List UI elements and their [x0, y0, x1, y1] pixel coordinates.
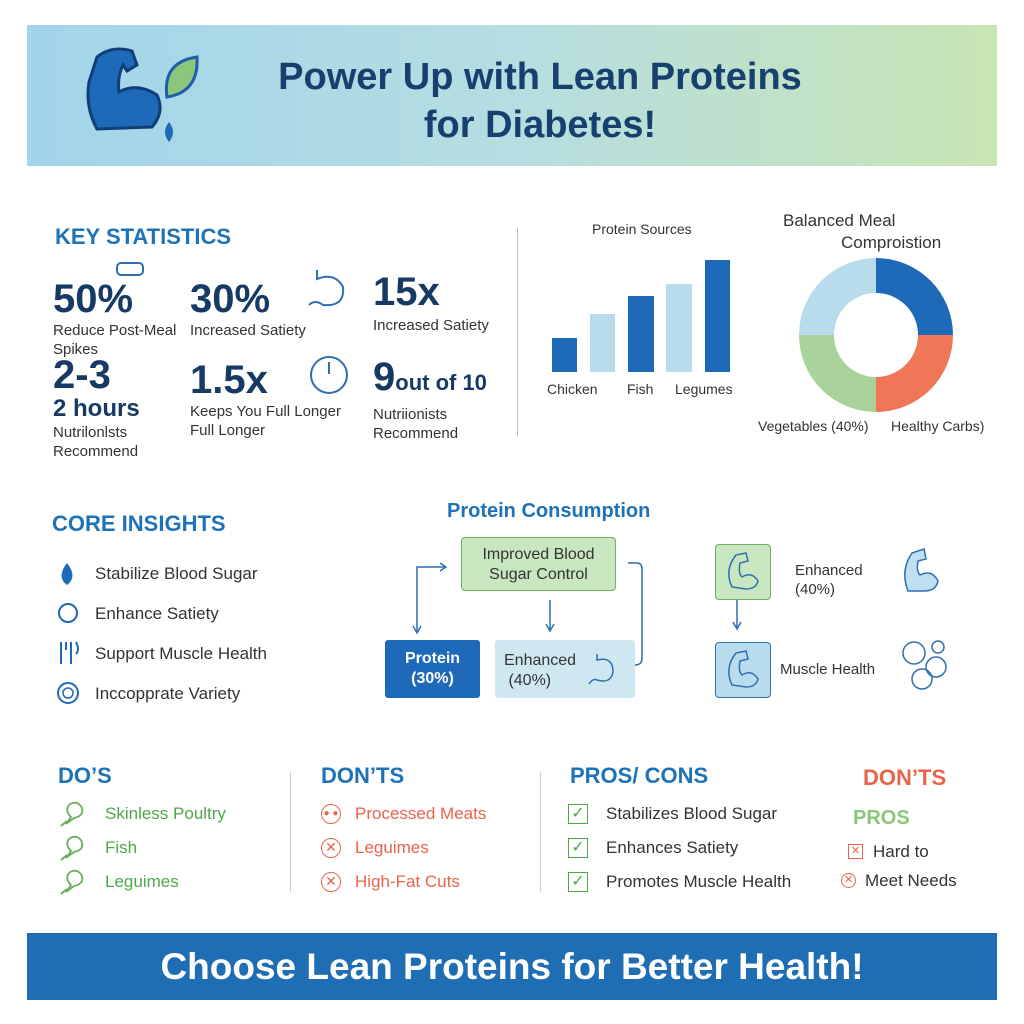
panel: pros/cons: ✓ [571, 873, 585, 890]
panel: pros/cons: Enhances Satiety [606, 838, 738, 857]
panel: pros/cons [568, 763, 791, 892]
stat 1.5x: Full Longer [190, 422, 265, 439]
panel: don'ts / pros: DON’TS [863, 765, 946, 790]
panel: don'ts / pros: Hard to [873, 842, 929, 861]
stat 15x: Increased Satiety [373, 317, 489, 334]
stat 50% [53, 277, 176, 358]
panel: do's: Fish [105, 838, 137, 857]
panel: pros/cons: Promotes Muscle Health [606, 872, 791, 891]
icon: stomach [308, 270, 344, 306]
panel: core insights: Support Muscle Health [95, 644, 267, 663]
stat 50%: Spikes [53, 341, 98, 358]
box: protein 30%: Protein [405, 650, 460, 667]
icon: drumstick [60, 836, 84, 861]
panel: don'ts / pros: ✕ [844, 874, 853, 886]
panel: pros/cons: ✓ [571, 839, 585, 856]
stat 9 out of 10 [373, 355, 487, 442]
flowchart: protein consumption: Protein Consumption [447, 500, 650, 522]
box: enhanced 40%: (40%) [508, 672, 551, 689]
panel: don'ts: DON’TS [321, 763, 404, 788]
panel: pros/cons: ✓ [571, 805, 585, 822]
panel: don'ts: ✕ [325, 839, 337, 855]
stat 30%: 30% [190, 277, 270, 321]
panel: don'ts: Leguimes [355, 838, 429, 857]
panel: key statistics [53, 224, 489, 460]
flowchart: protein consumption: Enhanced [795, 562, 863, 579]
stat 2-3 hours: Nutrilonlsts [53, 424, 127, 441]
stat 9 out of 10: Nutriionists [373, 406, 447, 423]
icon: satiety [58, 603, 78, 623]
stat 15x: 15x [373, 270, 440, 314]
stat 50%: 50% [53, 277, 133, 321]
panel: core insights: Stabilize Blood Sugar [95, 564, 258, 583]
panel: pros/cons: Stabilizes Blood Sugar [606, 804, 777, 823]
donut chart: balanced meal: Vegetables (40%) [758, 418, 869, 434]
icon: variety [57, 682, 79, 704]
icon: arm light [904, 548, 939, 592]
panel: don'ts: ✕ [325, 873, 337, 889]
footer banner [27, 933, 997, 1000]
box: protein 30%: (30%) [411, 670, 454, 687]
panel: core insights: Enhance Satiety [95, 604, 219, 623]
panel: don'ts: ● ● [324, 808, 338, 819]
box: enhanced 40% [495, 640, 635, 698]
box: improved blood sugar: Improved Blood [482, 546, 595, 563]
icon: muscle arm with leaf [86, 48, 199, 142]
stat 2-3 hours: 2-3 [53, 353, 111, 397]
flowchart: protein consumption: (40%) [795, 581, 835, 598]
donut chart: balanced meal: Balanced Meal [783, 211, 895, 230]
icon: drumstick [60, 870, 84, 895]
panel: do's [58, 763, 226, 895]
panel: do's: Skinless Poultry [105, 804, 226, 823]
bar chart: protein sources: Protein Sources [592, 221, 692, 237]
icon: clock [310, 356, 348, 394]
header banner [27, 25, 997, 166]
panel: don'ts / pros: ✕ [851, 845, 860, 857]
box: protein 30% [385, 640, 480, 698]
panel: core insights [52, 511, 267, 704]
donut chart: balanced meal [758, 211, 984, 434]
flowchart: protein consumption: Muscle Health [780, 661, 875, 678]
icon: drumstick [60, 802, 84, 827]
panel: don'ts: High-Fat Cuts [355, 872, 460, 891]
panel: core insights: Inccopprate Variety [95, 684, 240, 703]
panel: don'ts / pros: Meet Needs [865, 871, 957, 890]
stat 1.5x: Keeps You Full Longer [190, 403, 341, 420]
panel: do's: Leguimes [105, 872, 179, 891]
box: enhanced 40%: Enhanced [504, 652, 576, 669]
stat 2-3 hours [53, 353, 140, 460]
panel: core insights: CORE INSIGHTS [52, 511, 226, 536]
stat 30% [190, 277, 306, 339]
panel: don'ts: Processed Meats [355, 804, 486, 823]
panel: don'ts / pros [841, 765, 957, 890]
stat 30%: Increased Satiety [190, 322, 306, 339]
donut chart: balanced meal: Healthy Carbs) [891, 418, 984, 434]
stat 2-3 hours: Recommend [53, 443, 138, 460]
panel: pros/cons: PROS/ CONS [570, 763, 708, 788]
icon: glucose meter [116, 262, 144, 276]
stat 1.5x [190, 358, 341, 439]
bar chart: protein sources [547, 221, 733, 397]
donut chart: balanced meal: Comproistion [841, 233, 941, 252]
panel: don'ts / pros: PROS [853, 807, 910, 829]
panel: do's: DO’S [58, 763, 112, 788]
stat 9 out of 10: 9out of 10 [373, 355, 487, 399]
stat 15x [373, 270, 489, 334]
icon: people [902, 640, 947, 690]
stat 50%: Reduce Post-Meal [53, 322, 176, 339]
icon: fork [60, 642, 79, 664]
bar chart: protein sources: Legumes [675, 381, 733, 397]
bar chart: protein sources: Fish [627, 381, 653, 397]
icon box: green arm [715, 544, 771, 600]
flowchart: protein consumption [385, 500, 947, 698]
heading: KEY STATISTICS [55, 224, 231, 249]
stat 2-3 hours: 2 hours [53, 395, 140, 422]
box: improved blood sugar: Sugar Control [489, 566, 588, 583]
bar chart: protein sources: Chicken [547, 381, 598, 397]
title [278, 56, 802, 146]
icon: drop [62, 563, 72, 585]
panel: don'ts [321, 763, 486, 892]
footer banner: Choose Lean Proteins for Better Health! [160, 946, 864, 987]
title: for Diabetes! [424, 104, 656, 146]
stat 9 out of 10: Recommend [373, 425, 458, 442]
title: Power Up with Lean Proteins [278, 56, 802, 98]
box: improved blood sugar [461, 537, 616, 591]
stat 1.5x: 1.5x [190, 358, 268, 402]
icon box: blue arm [715, 642, 771, 698]
